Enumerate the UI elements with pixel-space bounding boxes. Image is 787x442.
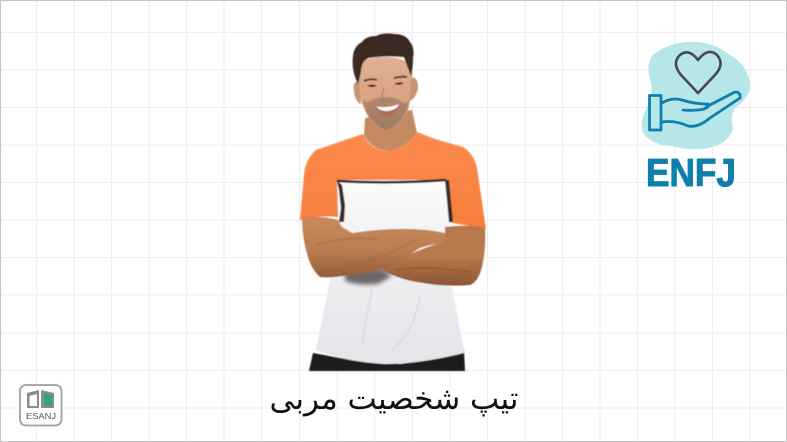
teal blob (642, 42, 750, 149)
eyes and brows (364, 77, 407, 81)
icon: ENFJ heart in hand (642, 42, 750, 195)
nose (381, 88, 391, 101)
neck (364, 110, 417, 151)
heart outline (676, 52, 721, 93)
hand outline (650, 92, 740, 130)
logo book (27, 390, 39, 408)
logo text: ESANJ (26, 412, 56, 421)
label: ENFJ: ENFJ (646, 152, 736, 195)
shorts (309, 350, 465, 371)
logo: ESANJ (20, 385, 62, 426)
left forearm (302, 217, 445, 277)
smile (375, 103, 400, 116)
right forearm (382, 226, 485, 286)
shadow under arms (345, 268, 392, 285)
orange shirt top and sleeves (300, 132, 486, 229)
hair (353, 33, 414, 84)
ears (354, 78, 418, 104)
head (359, 57, 412, 130)
shirt black trim (337, 180, 446, 182)
beard (363, 97, 410, 130)
photo: smiling man with crossed arms (300, 33, 486, 371)
white shirt panel (316, 180, 464, 364)
title: Persian caption: تیپ شخصیت مربی (270, 381, 518, 417)
